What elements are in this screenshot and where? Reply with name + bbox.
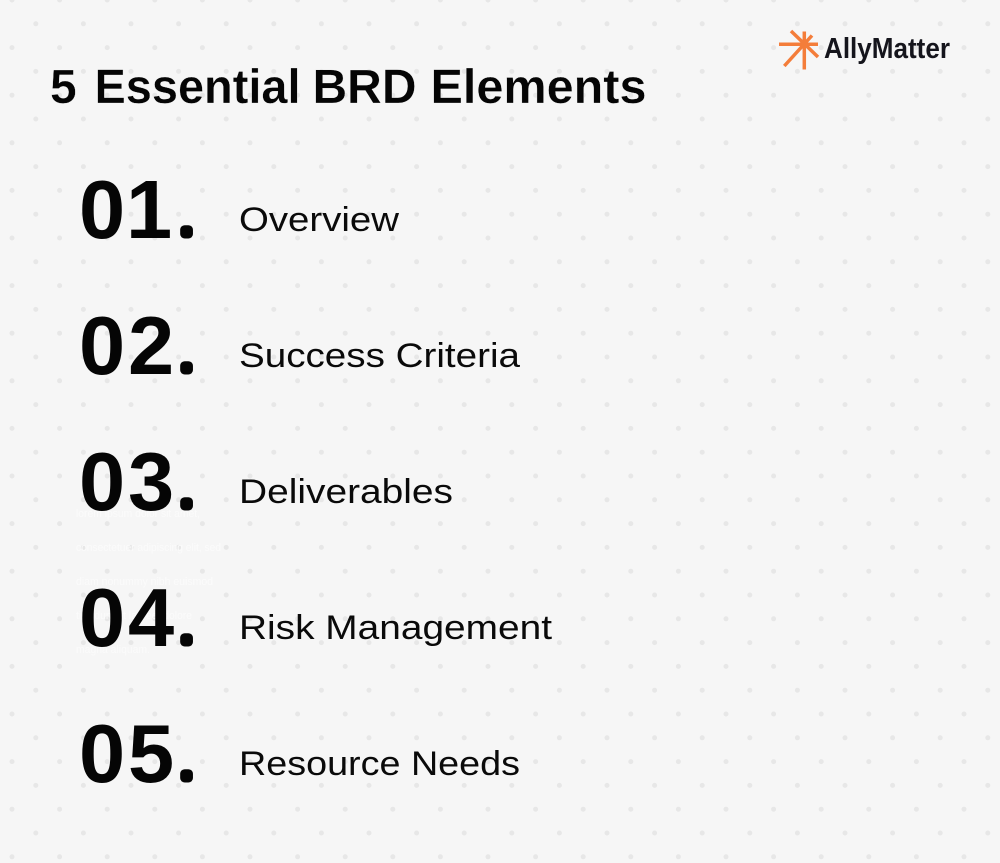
faint placeholder paragraph: consectetuer adipiscing elit, sed bbox=[76, 542, 221, 554]
number 01: . bbox=[181, 199, 192, 243]
faint placeholder paragraph bbox=[76, 508, 221, 656]
list item 03: Deliverables bbox=[79, 435, 453, 528]
number 03: . bbox=[181, 471, 192, 515]
title: Essential bbox=[94, 61, 300, 114]
number 05: . bbox=[181, 743, 192, 787]
title: 5 bbox=[50, 61, 77, 114]
number 05: 05 bbox=[79, 707, 174, 800]
number 02: 02 bbox=[79, 299, 174, 392]
label Risk Management: Risk Management bbox=[239, 609, 553, 647]
list item 02: Success Criteria bbox=[79, 299, 520, 392]
faint placeholder paragraph: diam nonummy nibh euismod bbox=[76, 576, 213, 588]
label Overview: Overview bbox=[239, 201, 399, 239]
label Deliverables: Deliverables bbox=[239, 473, 453, 511]
title: BRD bbox=[312, 61, 416, 114]
label Resource Needs: Resource Needs bbox=[239, 745, 520, 783]
icon: orange asterisk star bbox=[779, 31, 818, 70]
number 01: 01 bbox=[79, 163, 172, 256]
faint placeholder paragraph: magna aliquam. bbox=[76, 644, 150, 656]
number 03: 03 bbox=[79, 435, 174, 528]
number 02: . bbox=[181, 335, 192, 379]
list item 05: Resource Needs bbox=[79, 707, 520, 800]
number 04: . bbox=[181, 607, 192, 651]
logo wordmark: AllyMatter bbox=[824, 33, 950, 65]
label Success Criteria: Success Criteria bbox=[239, 337, 520, 375]
list item 01: Overview bbox=[79, 163, 399, 256]
title: Elements bbox=[430, 61, 646, 114]
faint placeholder paragraph: tincidunt ut laoreet dolore bbox=[76, 610, 192, 622]
logo: AllyMatter bbox=[779, 31, 950, 70]
number 04: 04 bbox=[79, 571, 174, 664]
faint placeholder paragraph: lorem ipsum dolor sit amet, bbox=[76, 508, 200, 520]
list item 04: Risk Management bbox=[79, 571, 553, 664]
title bbox=[50, 61, 646, 114]
